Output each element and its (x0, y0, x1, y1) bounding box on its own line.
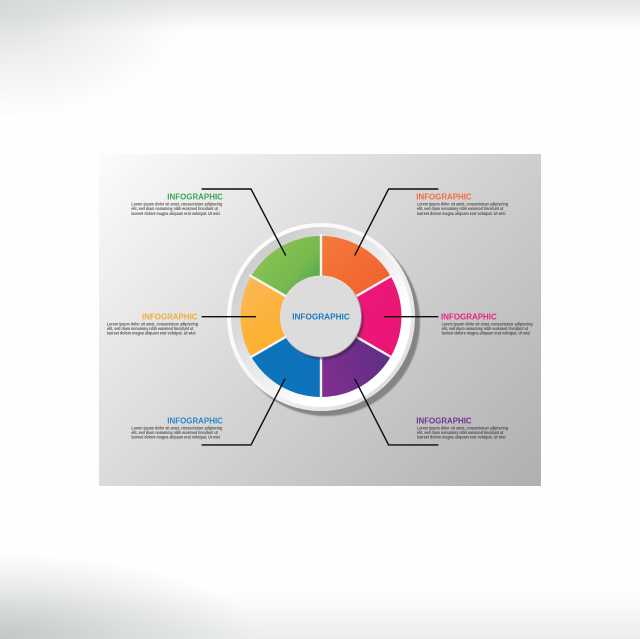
text block: blue: laoreet dolore magna aliquam erat volutpat. Ut wisi (131, 435, 220, 440)
text block: green (131, 192, 223, 216)
segment: purple (321, 337, 391, 397)
text block: orange: laoreet dolore magna aliquam erat volutpat. Ut wisi (417, 211, 506, 216)
text block: pink: INFOGRAPHIC (441, 311, 497, 321)
text block: purple: laoreet dolore magna aliquam erat volutpat. Ut wisi (417, 435, 506, 440)
text block: purple: Lorem ipsum dolor sit amet, consectetuer adipiscing (417, 426, 508, 431)
text block: pink: laoreet dolore magna aliquam erat volutpat. Ut wisi (442, 331, 530, 336)
text block: yellow: laoreet dolore magna aliquam erat volutpat. Ut wisi (107, 331, 196, 336)
donut chart (227, 223, 420, 416)
leader line: green (202, 189, 286, 256)
text block: purple (416, 415, 508, 440)
grey inner disc (231, 227, 411, 407)
text block: purple: elit, sed diam nonummy nibh euismod tincidunt ut (417, 430, 504, 435)
text block: green: laoreet dolore magna aliquam erat volutpat. Ut wisi (131, 211, 220, 216)
hub label: INFOGRAPHIC (292, 312, 350, 322)
text block: pink (441, 311, 533, 336)
text block: yellow: Lorem ipsum dolor sit amet, consectetuer adipiscing (107, 321, 198, 326)
leader line: purple (355, 379, 438, 445)
text block: orange (416, 192, 508, 216)
text block: orange: Lorem ipsum dolor sit amet, consectetuer adipiscing (417, 202, 508, 207)
text block: orange: INFOGRAPHIC (416, 192, 472, 202)
text block: pink: Lorem ipsum dolor sit amet, consectetuer adipiscing (442, 321, 533, 326)
leader line: yellow (202, 316, 256, 318)
panel: grey backdrop (99, 154, 541, 486)
leader line: blue (202, 379, 285, 445)
segment: blue (251, 337, 321, 397)
segment: orange (321, 236, 391, 296)
segment: yellow (241, 276, 286, 357)
white outer ring (227, 223, 415, 411)
text block: blue (131, 415, 223, 440)
centre hub (281, 277, 361, 357)
text block: orange: elit, sed diam nonummy nibh euismod tincidunt ut (417, 206, 504, 211)
text block: pink: elit, sed diam nonummy nibh euismod tincidunt ut (442, 326, 528, 331)
hub shadow (284, 280, 364, 360)
text block: blue: INFOGRAPHIC (167, 415, 223, 425)
segment: pink (356, 276, 401, 357)
ring drop shadow (232, 228, 420, 416)
text block: purple: INFOGRAPHIC (416, 415, 472, 425)
text block: blue: Lorem ipsum dolor sit amet, consectetuer adipiscing (131, 426, 222, 431)
text block: green: Lorem ipsum dolor sit amet, consectetuer adipiscing (131, 202, 222, 207)
text block: yellow: elit, sed diam nonummy nibh euismod tincidunt ut (107, 326, 194, 331)
text block: yellow (107, 311, 198, 336)
segment separators (249, 234, 393, 399)
leader line: pink (384, 316, 438, 318)
leader line: orange (355, 189, 438, 256)
text block: green: elit, sed diam nonummy nibh euismod tincidunt ut (131, 206, 218, 211)
text block: yellow: INFOGRAPHIC (142, 311, 198, 321)
text block: blue: elit, sed diam nonummy nibh euismod tincidunt ut (131, 430, 218, 435)
text block: green: INFOGRAPHIC (167, 192, 223, 202)
segment: green (251, 236, 321, 296)
